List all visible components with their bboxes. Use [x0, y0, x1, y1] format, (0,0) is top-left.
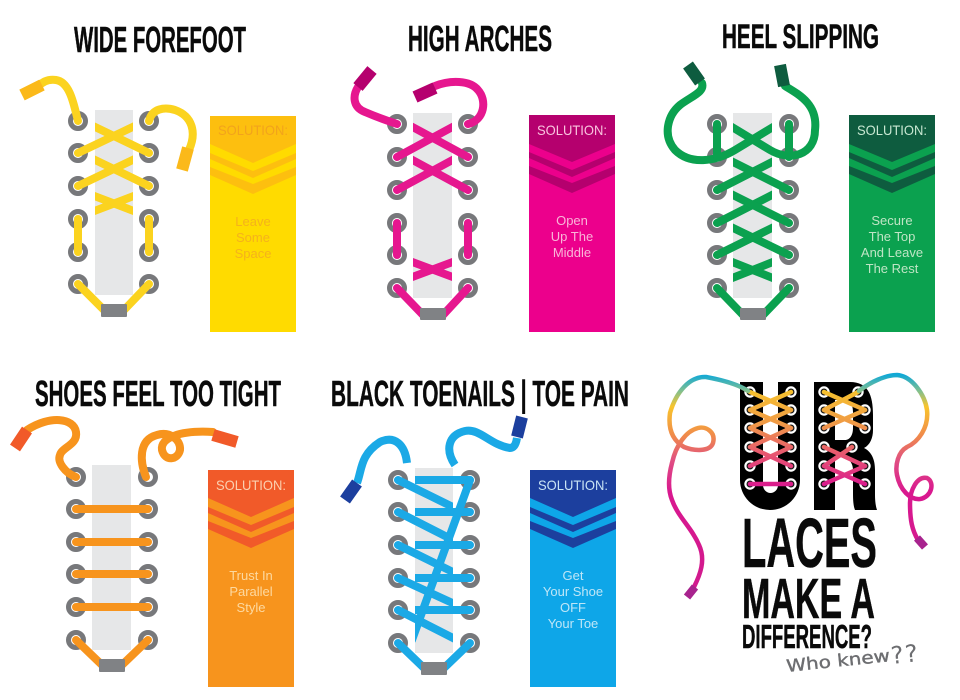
solution card: high arches: SOLUTION: — [537, 122, 607, 138]
solution card: high arches: Open — [556, 213, 588, 228]
handwritten note: Who knew — [785, 646, 891, 677]
lacing diagram: wide forefoot — [22, 80, 193, 317]
lacing diagram: high arches — [355, 70, 483, 320]
solution card: wide forefoot: Some — [236, 230, 270, 245]
solution card: heel slipping: The Top — [869, 229, 915, 244]
solution card: heel slipping: The Rest — [866, 261, 919, 276]
panel: black toenails — [331, 373, 629, 687]
heading: black toenails and toe pain: BLACK TOENAILS | TOE PAIN — [331, 373, 629, 415]
solution card: high arches — [529, 115, 615, 332]
solution card: heel slipping: SOLUTION: — [857, 122, 927, 138]
panel: high arches — [355, 18, 615, 332]
solution card: heel slipping: Secure — [871, 213, 913, 228]
heading: high arches: HIGH ARCHES — [408, 18, 552, 59]
solution card: black toenails: Your Toe — [548, 616, 598, 631]
lacing diagram: shoes feel too tight — [15, 420, 237, 672]
rainbow lacing: UR — [750, 392, 865, 484]
title: make a: MAKE A — [742, 567, 875, 631]
lace tips — [687, 538, 925, 597]
panel: shoes feel too tight — [15, 373, 294, 687]
panel: UR laces make a difference — [669, 375, 931, 681]
handwritten note — [785, 639, 919, 681]
solution card: shoes feel too tight: Style — [237, 600, 265, 615]
eyelets: UR — [745, 387, 870, 489]
solution card: black toenails: Get — [563, 568, 584, 583]
solution card: wide forefoot: Space — [235, 246, 271, 261]
solution card: wide forefoot: SOLUTION: — [218, 122, 288, 138]
solution card: shoes feel too tight: Parallel — [229, 584, 273, 599]
heading: wide forefoot: WIDE FOREFOOT — [74, 19, 246, 60]
handwritten note: ?? — [889, 639, 919, 670]
solution card: black toenails: OFF — [560, 600, 586, 615]
solution card: shoes feel too tight: Trust In — [229, 568, 273, 583]
solution card: black toenails: Your Shoe — [543, 584, 603, 599]
solution card: black toenails: SOLUTION: — [538, 477, 608, 493]
lacing diagram: heel slipping — [668, 65, 815, 320]
solution card: heel slipping: And Leave — [861, 245, 923, 260]
free lace: left — [669, 377, 748, 587]
panel: wide forefoot — [22, 19, 296, 332]
solution card: high arches: Up The — [551, 229, 593, 244]
panel: heel slipping — [668, 18, 935, 332]
solution card: black toenails — [530, 470, 616, 687]
lacing diagram: black toenails — [345, 417, 522, 675]
solution card: shoes feel too tight: SOLUTION: — [216, 477, 286, 493]
heading: shoes feel too tight: SHOES FEEL TOO TIGHT — [35, 373, 281, 414]
solution card: wide forefoot — [210, 116, 296, 332]
solution card: shoes feel too tight — [208, 470, 294, 687]
solution card: heel slipping — [849, 115, 935, 332]
solution card: wide forefoot: Leave — [235, 214, 271, 229]
title letters: UR — [740, 382, 877, 510]
free lace: right — [859, 375, 931, 540]
solution card: high arches: Middle — [553, 245, 591, 260]
